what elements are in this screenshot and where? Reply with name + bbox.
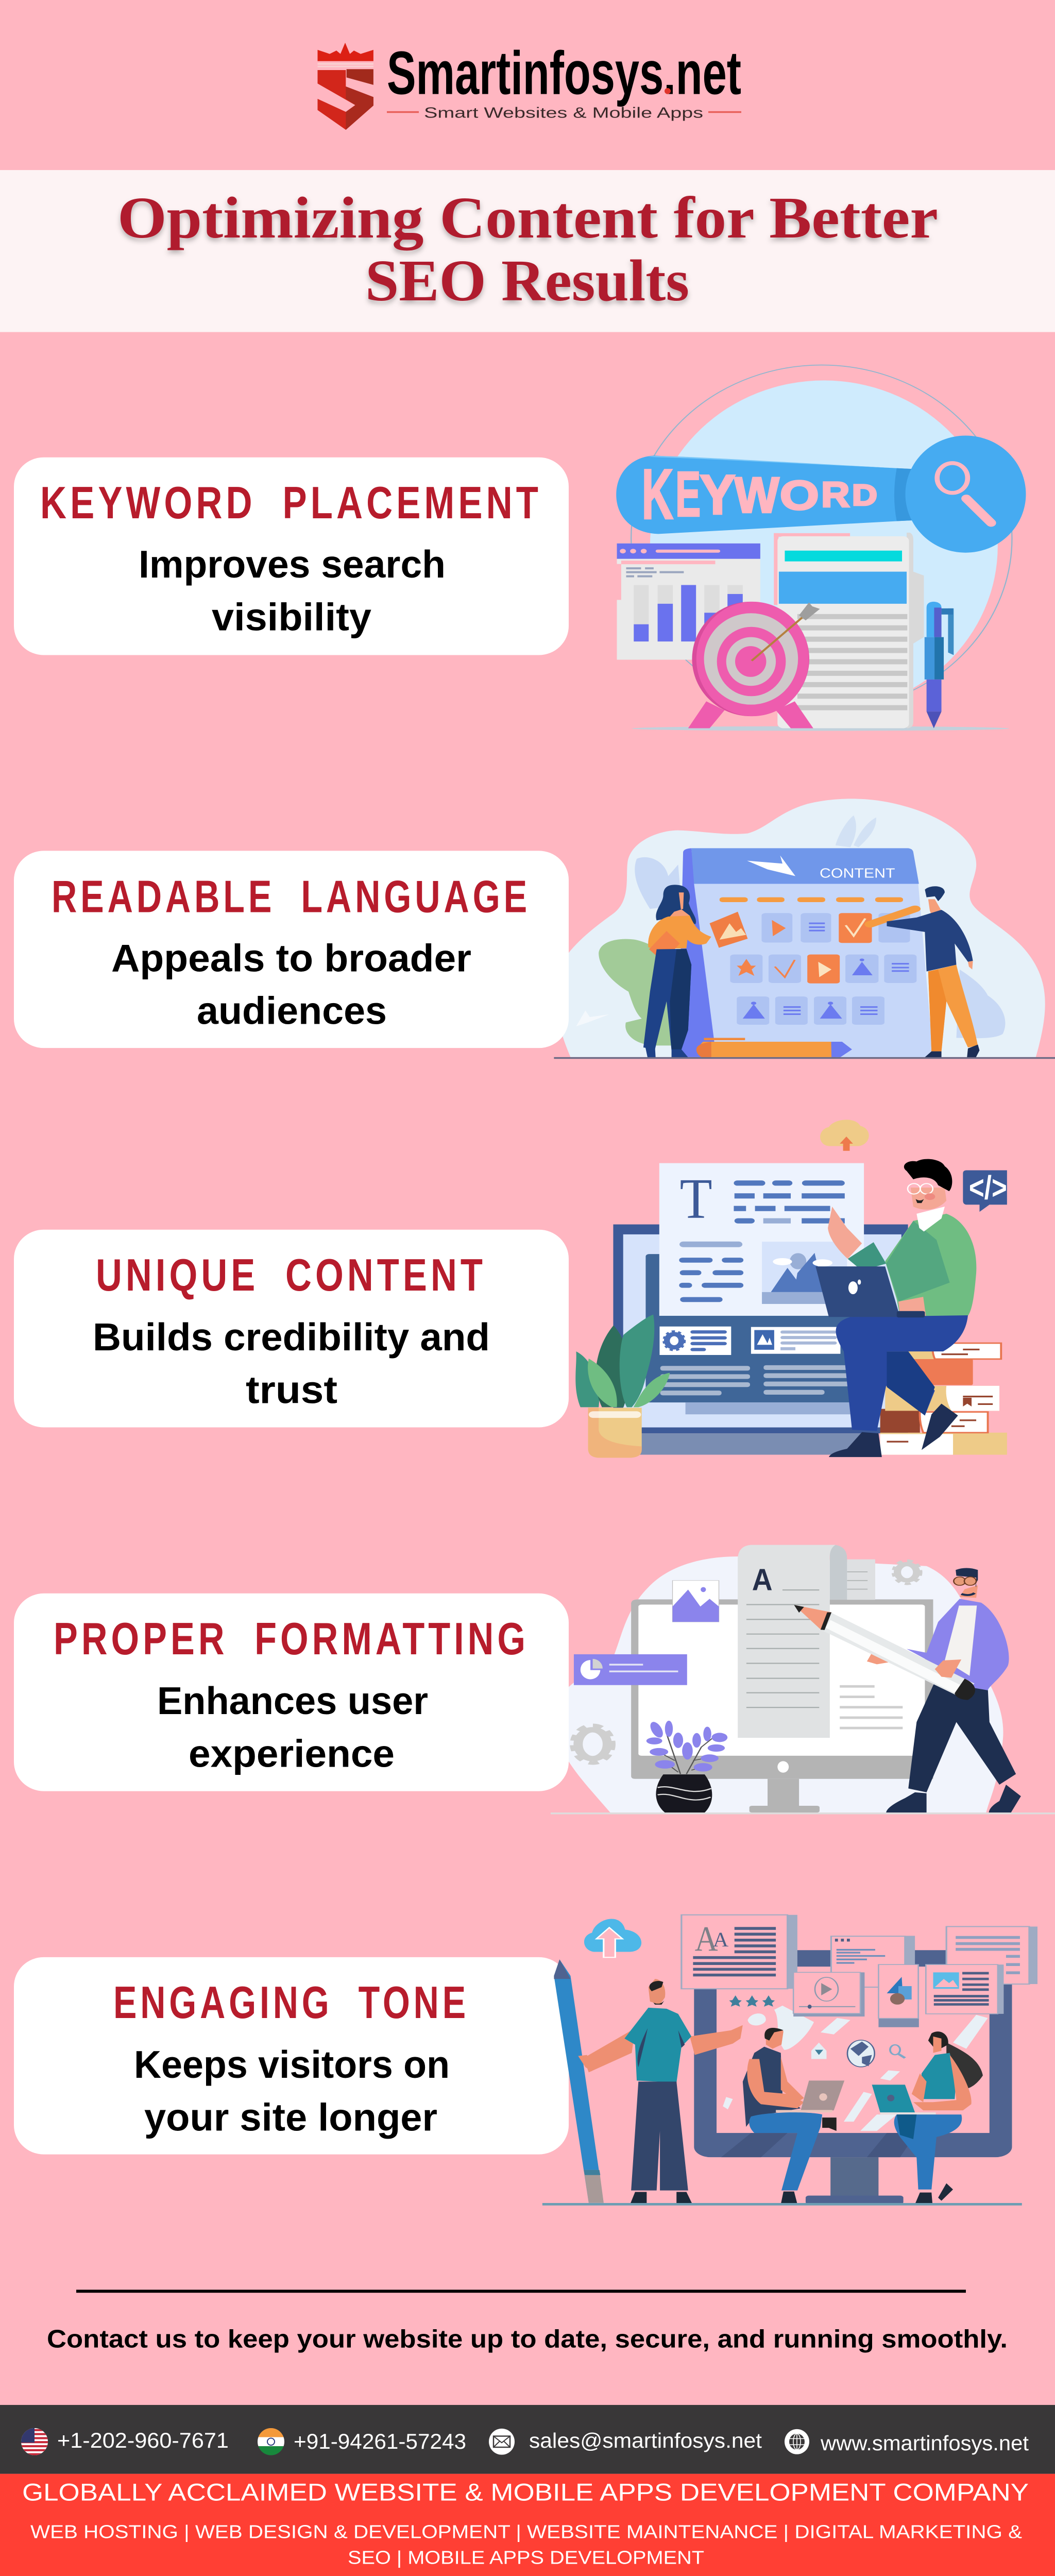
plant and pot (646, 1721, 727, 1812)
icon: India flag (258, 2428, 284, 2455)
document (774, 533, 924, 728)
card 3 heading: UNIQUE CONTENT (96, 1249, 486, 1300)
cloud upload icon (584, 1919, 641, 1957)
card 5 body: Keeps visitors on (134, 2043, 450, 2087)
illustration: keyword search (616, 365, 1026, 731)
paper plane small (576, 1010, 609, 1026)
card 1: keyword placement (14, 457, 569, 655)
keyword text: W (735, 467, 779, 523)
letters AA: A (713, 1928, 728, 1951)
book stack (880, 1343, 1007, 1455)
card 3 body: trust (246, 1368, 337, 1412)
services list (30, 2521, 1022, 2568)
video panel (793, 1972, 864, 2016)
woman figure (643, 885, 747, 1058)
target with arrow (688, 602, 820, 728)
phone India: +91-94261-57243 (294, 2430, 466, 2454)
text panel (682, 1915, 797, 1989)
website: www.smartinfosys.net (820, 2431, 1029, 2455)
pie card (574, 1654, 687, 1685)
services list: SEO | MOBILE APPS DEVELOPMENT (348, 2547, 704, 2568)
letters AA: A (695, 1919, 718, 1959)
gear left (573, 1725, 612, 1763)
card 4 body (157, 1680, 428, 1775)
logo (317, 39, 741, 130)
card 2 body (111, 937, 471, 1032)
stars and icons (729, 1995, 905, 2067)
plant (575, 1315, 670, 1458)
keyword text: K (642, 454, 673, 534)
ground line (542, 2203, 1022, 2206)
seated woman (872, 2031, 983, 2204)
code bubble (963, 1170, 1007, 1212)
big pencil (554, 1959, 604, 2203)
man with pencil (794, 1568, 1021, 1812)
card 2: readable language (14, 851, 569, 1048)
card 5: engaging tone (14, 1957, 569, 2155)
card 2 body: Appeals to broader (111, 937, 471, 980)
pen (925, 602, 954, 728)
card 1 body (139, 543, 446, 639)
image panel (926, 1964, 1003, 2014)
logo wordmark: Smartinfosys.net (387, 39, 741, 107)
letter A: A (752, 1562, 773, 1597)
phone panel (878, 1964, 919, 2027)
card 5 body (134, 2043, 450, 2140)
paper sheet (738, 1545, 875, 1738)
company tagline: GLOBALLY ACCLAIMED WEBSITE & MOBILE APPS DEVELOPMENT COMPANY (22, 2479, 1029, 2506)
keyword text: Y (700, 464, 736, 526)
laptop man (815, 1159, 976, 1457)
ground line (554, 1057, 1055, 1059)
title (117, 185, 938, 314)
code bubble: </> (969, 1170, 1007, 1206)
title: Optimizing Content for Better (117, 185, 938, 251)
card 2 body: audiences (197, 989, 387, 1032)
illustration: content calendar (554, 799, 1055, 1059)
keyword text: O (780, 472, 819, 518)
card 1 heading: KEYWORD PLACEMENT (40, 477, 542, 528)
card 5 heading: ENGAGING TONE (113, 1977, 469, 2028)
card 3 body: Builds credibility and (93, 1316, 490, 1359)
image card (673, 1581, 719, 1622)
monitor (613, 1225, 908, 1455)
keyword bar (616, 436, 1026, 553)
icon: crown shield (317, 43, 373, 130)
icon: US flag (21, 2428, 48, 2455)
cloud upload icon (820, 1120, 869, 1151)
large monitor (694, 1950, 1012, 2204)
icon: mail (489, 2429, 515, 2455)
icon: globe (785, 2429, 809, 2454)
card 3 body (93, 1316, 490, 1412)
illustration: unique content (575, 1120, 1007, 1458)
title: SEO Results (365, 248, 689, 314)
ground line (551, 1812, 1055, 1814)
contact band (0, 2405, 1055, 2474)
title band (0, 170, 1055, 332)
chart window (617, 544, 760, 659)
seated man (743, 2028, 844, 2204)
back panel right (946, 1926, 1037, 1984)
card 3: unique content (14, 1230, 569, 1428)
man figure (870, 886, 979, 1058)
browser panel (831, 1936, 915, 1987)
document sheet (659, 1163, 864, 1316)
green leaf (599, 939, 672, 1045)
desktop monitor (631, 1599, 933, 1812)
card 1 body: Improves search (139, 543, 446, 586)
contact call to action: Contact us to keep your website up to date, secure, and running smoothly. (47, 2325, 1008, 2353)
services band (0, 2474, 1055, 2576)
pencil on floor (696, 1038, 852, 1057)
gear top (894, 1561, 920, 1584)
card 4 heading: PROPER FORMATTING (54, 1613, 529, 1664)
illustration: engaging tone team (542, 1915, 1037, 2206)
board label: CONTENT (820, 866, 895, 880)
divider line (76, 2290, 966, 2293)
email: sales@smartinfosys.net (529, 2428, 762, 2452)
illustration: proper formatting (551, 1545, 1055, 1814)
card 4 body: experience (189, 1732, 395, 1775)
services list: WEB HOSTING | WEB DESIGN & DEVELOPMENT | WEBSITE MAINTENANCE | DIGITAL MARKETING & (30, 2521, 1022, 2543)
card 4 body: Enhances user (157, 1680, 428, 1723)
keyword text: R (821, 474, 849, 514)
keyword text: D (852, 479, 877, 512)
card 1 body: visibility (212, 596, 371, 639)
card 4: proper formatting (14, 1594, 569, 1791)
keyword text: E (675, 459, 701, 530)
board (678, 848, 933, 1057)
card 2 heading: READABLE LANGUAGE (52, 871, 531, 922)
phone US: +1-202-960-7671 (57, 2429, 229, 2453)
logo tagline: Smart Websites & Mobile Apps (424, 105, 703, 121)
card 5 body: your site longer (144, 2096, 437, 2140)
letter T: T (680, 1167, 712, 1231)
standing man (582, 1979, 743, 2204)
